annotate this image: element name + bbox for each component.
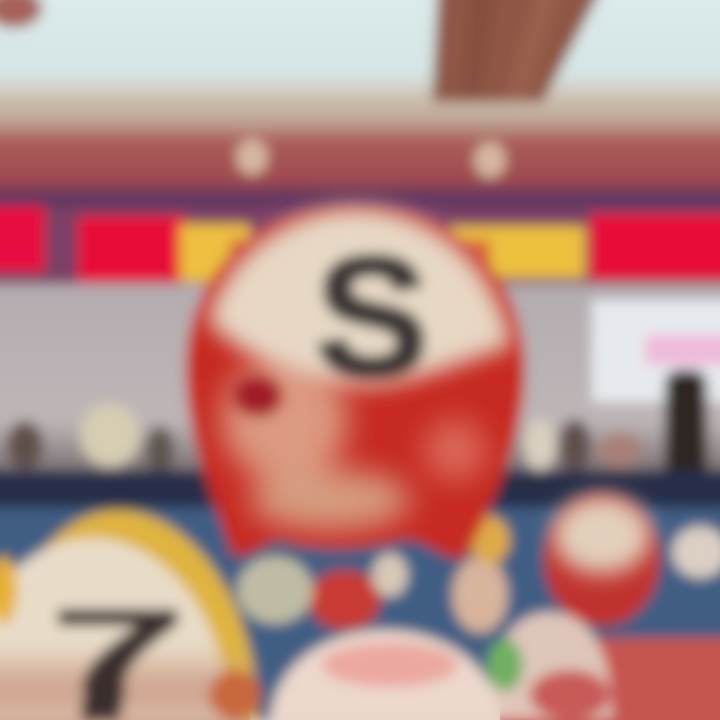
floor band — [0, 508, 720, 720]
background objects on the counter — [7, 370, 707, 520]
banner — [0, 206, 720, 284]
numeral 7: 7 — [51, 587, 185, 715]
small ball: right — [544, 494, 720, 626]
background: ceiling — [0, 0, 720, 300]
right bottom ball with green leaf — [467, 612, 612, 720]
ball skin patch — [223, 358, 485, 530]
bottom ball — [209, 630, 500, 720]
ball red spot — [234, 376, 282, 416]
counter band — [0, 470, 720, 510]
ceiling lights — [236, 139, 506, 178]
corner fixture — [0, 0, 42, 28]
bright window with pink light — [592, 300, 720, 402]
main ball — [186, 205, 525, 558]
bottom edge underlay — [0, 680, 720, 720]
red carpet — [560, 638, 720, 720]
background: wall — [0, 284, 720, 480]
small figures under the main ball — [237, 516, 510, 633]
ball cream cap — [208, 208, 512, 385]
left ball with numeral 7 — [0, 510, 258, 720]
skylight beam — [432, 0, 606, 102]
ball numeral S: S — [315, 222, 429, 412]
